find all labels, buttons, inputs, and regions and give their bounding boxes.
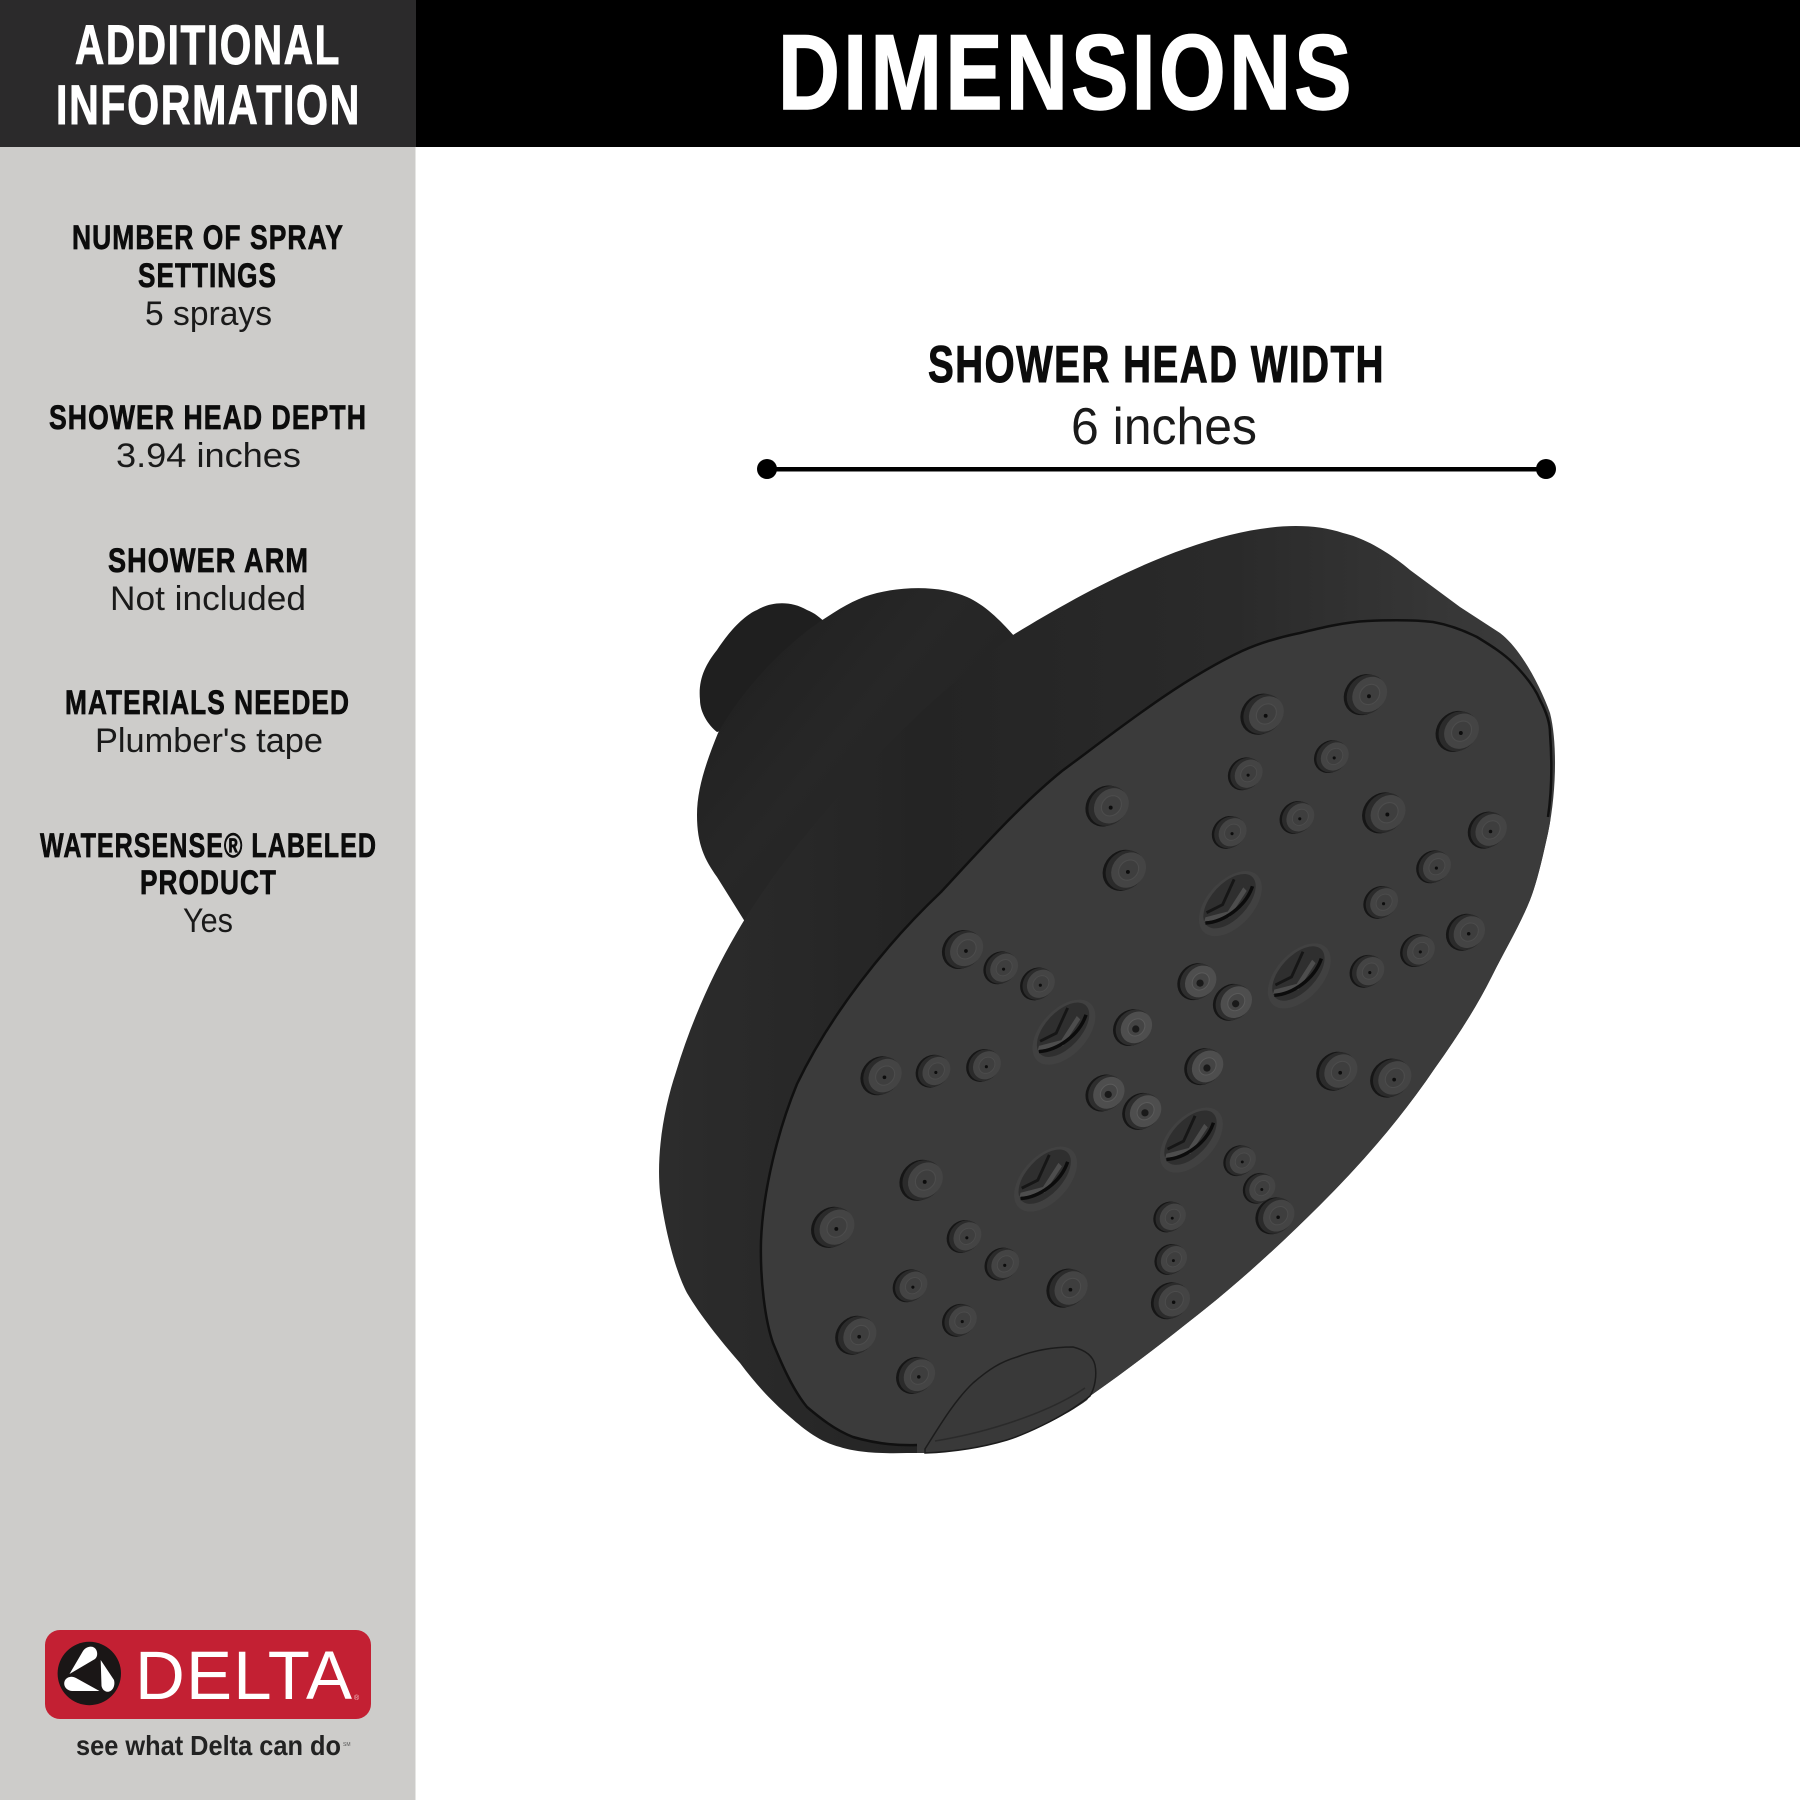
spray selector tab (925, 1347, 1096, 1453)
large nozzles (803, 666, 1513, 1401)
small nozzles (886, 734, 1457, 1343)
panel: additional information sidebar (0, 0, 416, 1800)
spec: watersense labeled product: Yes (183, 902, 233, 940)
spec: shower head depth (49, 399, 367, 475)
pipe nub (700, 603, 825, 732)
spec: materials needed (65, 684, 350, 760)
sidebar header (0, 0, 416, 147)
sidebar header: INFORMATION (56, 73, 361, 136)
shower head illustration (659, 526, 1600, 1470)
spec: shower arm: SHOWER ARM (108, 542, 309, 580)
spec: watersense labeled product: PRODUCT (140, 864, 277, 902)
title bar: dimensions: DIMENSIONS (778, 12, 1355, 132)
large spray openings (1002, 859, 1343, 1223)
dimension line: width (757, 459, 1556, 479)
dimension label: shower head width: 6 inches (1071, 398, 1257, 456)
spec: materials needed: MATERIALS NEEDED (65, 684, 350, 722)
dimension label: shower head width (928, 336, 1385, 456)
spec: shower arm: Not included (110, 580, 306, 618)
center nozzles (1078, 956, 1258, 1137)
spec: number of spray settings: NUMBER OF SPRAY (72, 219, 344, 257)
logo: delta: SM (343, 1742, 350, 1748)
neck (697, 588, 1015, 925)
face (761, 620, 1600, 1470)
icon: delta triangle mark (58, 1642, 121, 1705)
sidebar header: ADDITIONAL (75, 13, 341, 76)
spec: number of spray settings: SETTINGS (138, 257, 277, 295)
logo: delta: DELTA (135, 1637, 352, 1714)
logo: delta: ® (354, 1694, 360, 1702)
spec: shower head depth: 3.94 inches (116, 437, 301, 475)
spec: materials needed: Plumber's tape (95, 722, 323, 760)
spec: watersense labeled product (40, 827, 377, 940)
side body (659, 526, 1555, 1453)
spec: shower head depth: SHOWER HEAD DEPTH (49, 399, 367, 437)
spec: number of spray settings (72, 219, 344, 333)
spec: number of spray settings: 5 sprays (145, 295, 272, 333)
spec: shower arm (108, 542, 309, 618)
dimension label: shower head width: SHOWER HEAD WIDTH (928, 336, 1385, 394)
spec: watersense labeled product: WATERSENSE® LABELED (40, 827, 377, 865)
logo: delta (45, 1630, 371, 1761)
title bar: dimensions (416, 0, 1800, 147)
logo: delta: see what Delta can do (76, 1730, 341, 1761)
